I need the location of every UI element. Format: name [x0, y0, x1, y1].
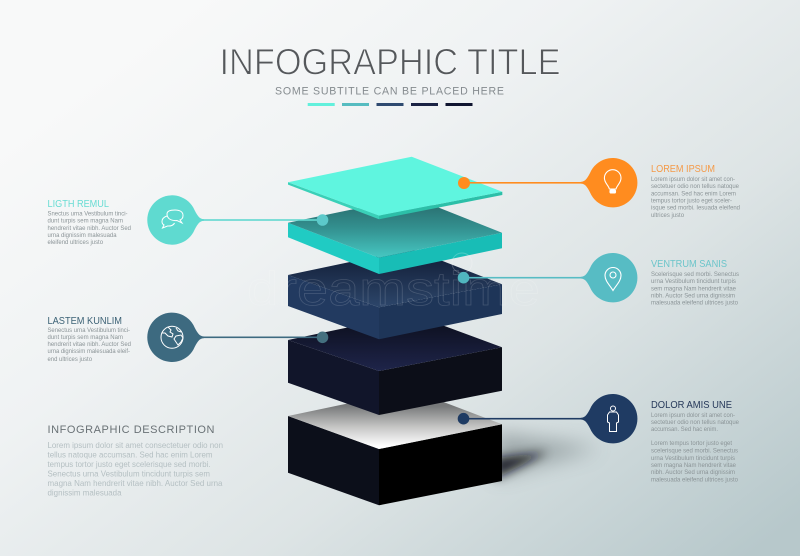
infographic description	[48, 424, 223, 498]
body text: Scelerisque sed morbi. Senectus	[651, 271, 740, 278]
heading: LIGTH REMUL	[48, 198, 109, 210]
body text	[651, 176, 740, 219]
title: INFOGRAPHIC TITLE	[220, 42, 560, 82]
cast shadow of the stack	[495, 432, 600, 479]
body text: sem magna Nam hendrerit vitae	[651, 286, 736, 292]
heading: DOLOR AMIS UNE	[651, 399, 732, 411]
callout: lastem kunlim	[48, 313, 328, 363]
body text: sectetuer odio non tellus natoque	[651, 183, 739, 190]
connector and dot	[200, 332, 328, 343]
icon: speech bubbles	[162, 210, 183, 228]
body text: end ultrices justo	[48, 356, 92, 363]
pin badge	[581, 394, 637, 443]
layer 4: dark navy block	[288, 314, 502, 415]
body text: Lorem tempus tortor justo eget	[651, 440, 732, 447]
icon: globe	[161, 326, 183, 348]
body text: urna Vestibulum tincidunt turpis	[651, 278, 737, 285]
body text: scelerisque sed morbi. Senectus	[651, 448, 739, 454]
callout: ventrum sanis	[458, 253, 740, 306]
body text	[651, 271, 740, 306]
pin badge	[581, 253, 637, 302]
heading: LASTEM KUNLIM	[48, 315, 122, 327]
body text: urna dignissim malesuada	[48, 232, 117, 239]
icon: map pin	[605, 268, 621, 290]
layer 3: navy block	[288, 249, 502, 339]
heading: VENTRUM SANIS	[651, 258, 727, 270]
connector and dot	[458, 413, 586, 425]
body text: Senectus urna Vestibulum tinci-	[48, 327, 130, 334]
body text: tellus natoque accumsan. Sed hac enim Lorem	[48, 450, 212, 460]
body text: tempus tortor justo eget scelerisque sed morbi.	[48, 459, 210, 469]
pin badge	[147, 195, 204, 245]
body text: eleifend ultrices justo	[48, 239, 103, 246]
body text: accumsan. Sed hac enim.	[651, 426, 718, 433]
body text: hendrerit vitae nibh. Auctor Sed	[48, 225, 131, 232]
body text: accumsan. Sed hac enim Lorem	[651, 190, 736, 198]
body text: dunt turpis sem magna Nam	[48, 218, 123, 224]
body text: dignissim malesuada	[48, 488, 122, 498]
body text: magna Nam hendrerit vitae nibh. Auctor Sed urna	[48, 478, 223, 488]
connector and dot	[458, 272, 586, 284]
body text	[48, 210, 131, 246]
layer 5: bottom block	[288, 390, 502, 505]
body text	[651, 412, 739, 484]
body text	[48, 440, 223, 498]
body text: sem magna Nam hendrerit vitae	[651, 462, 736, 469]
body text: nibh. Auctor Sed urna dignissim	[651, 469, 735, 476]
watermark: dreamstime	[247, 262, 540, 315]
body text: urna dignissim malesuada eleif-	[48, 348, 130, 355]
connector and dot	[200, 214, 328, 226]
layer 2: teal block	[288, 197, 502, 274]
icon: person	[608, 406, 618, 432]
body text: isque sed morbi. Iesuada eleifend	[651, 204, 740, 212]
body text: malesuada eleifend ultrices justo	[651, 300, 738, 306]
callout: dolor amis une	[458, 394, 739, 484]
heading: LOREM IPSUM	[651, 163, 715, 175]
body text: sectetuer odio non tellus natoque	[651, 419, 739, 426]
connector and dot	[458, 177, 586, 189]
pin badge	[581, 158, 637, 207]
body text: dunt turpis sem magna Nam	[48, 334, 123, 341]
body text	[48, 327, 131, 363]
body text: malesuada eleifend ultrices justo	[651, 476, 738, 484]
layered stack	[288, 157, 502, 505]
body text: tempus tortor justo eget sceler-	[651, 198, 732, 204]
body text: hendrerit vitae nibh. Auctor Sed	[48, 341, 131, 348]
callout: lorem ipsum	[458, 158, 740, 219]
colour dash row	[308, 103, 472, 106]
layer 1: top mint plate	[288, 157, 502, 219]
heading: INFOGRAPHIC DESCRIPTION	[48, 424, 215, 436]
body text: Lorem ipsum dolor sit amet con-	[651, 176, 735, 183]
body text: ultrices justo	[651, 212, 684, 219]
callout: ligth remul	[48, 195, 328, 246]
pin badge	[147, 313, 204, 362]
body text: urna Vestibulum tincidunt turpis	[651, 455, 736, 462]
body text: nibh. Auctor Sed urna dignissim	[651, 292, 735, 300]
body text: Lorem ipsum dolor sit amet consectetuer odio non	[48, 440, 223, 450]
body text: Snectus urna Vestibulum tinci-	[48, 210, 128, 218]
body text: Senectus urna Vestibulum tincidunt turpis sem	[48, 469, 210, 479]
body text: Lorem ipsum dolor sit amet con-	[651, 412, 735, 419]
icon: light bulb	[604, 170, 621, 193]
subtitle: SOME SUBTITLE CAN BE PLACED HERE	[275, 86, 504, 98]
